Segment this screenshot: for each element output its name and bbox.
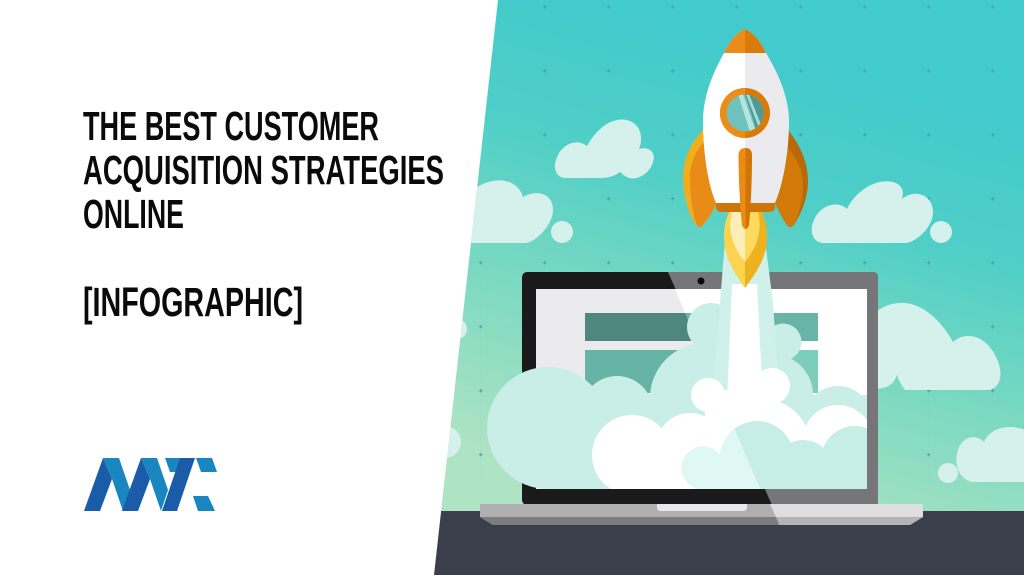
rocket body: [700, 25, 791, 205]
smoke: light back layer: [487, 303, 872, 489]
puff: left edge lower: [447, 427, 461, 458]
rocket: [683, 25, 808, 288]
laptop: [480, 272, 923, 525]
content bar: lower: [585, 350, 818, 393]
screen: [536, 289, 867, 489]
bezel glare: [668, 272, 878, 505]
puff: right small: [930, 221, 952, 243]
ground: [430, 511, 1024, 575]
rocket trail: white core: [727, 284, 763, 400]
rocket trail: outer: [712, 240, 780, 400]
cloud: right middle: [870, 303, 1000, 390]
screen shaded part: [536, 289, 760, 489]
puff: left small: [551, 221, 573, 243]
content bar: top: [585, 313, 818, 341]
cloud: upper left: [555, 120, 654, 179]
title: ONLINE: [83, 191, 184, 237]
smoke: white middle layer: [592, 368, 867, 489]
logo: MTC: [84, 458, 217, 511]
title: THE BEST CUSTOMER: [83, 103, 379, 149]
cloud: upper right: [812, 181, 933, 243]
webcam: [698, 278, 704, 284]
laptop bezel: [522, 272, 878, 505]
cloud: bottom right: [956, 427, 1024, 482]
sky gradient background: [430, 0, 1024, 512]
right fin: [775, 130, 808, 227]
title: ACQUISITION STRATEGIES: [83, 147, 444, 193]
base band: [716, 203, 775, 212]
flame: [724, 210, 767, 288]
puff: bottom right small: [938, 463, 958, 483]
window: [720, 88, 770, 138]
puff: left edge upper: [460, 320, 467, 338]
title: [INFOGRAPHIC]: [83, 279, 303, 325]
nose cone: [724, 29, 766, 53]
smoke: front layer: [682, 421, 867, 489]
laptop base: [480, 504, 923, 525]
centre fin: [738, 148, 752, 229]
cloud: left: [465, 180, 553, 243]
left fin: [683, 127, 717, 227]
background clouds: [429, 120, 1024, 483]
illustration panel: [429, 0, 1024, 575]
grid dots: [478, 4, 995, 457]
title: [83, 103, 444, 325]
